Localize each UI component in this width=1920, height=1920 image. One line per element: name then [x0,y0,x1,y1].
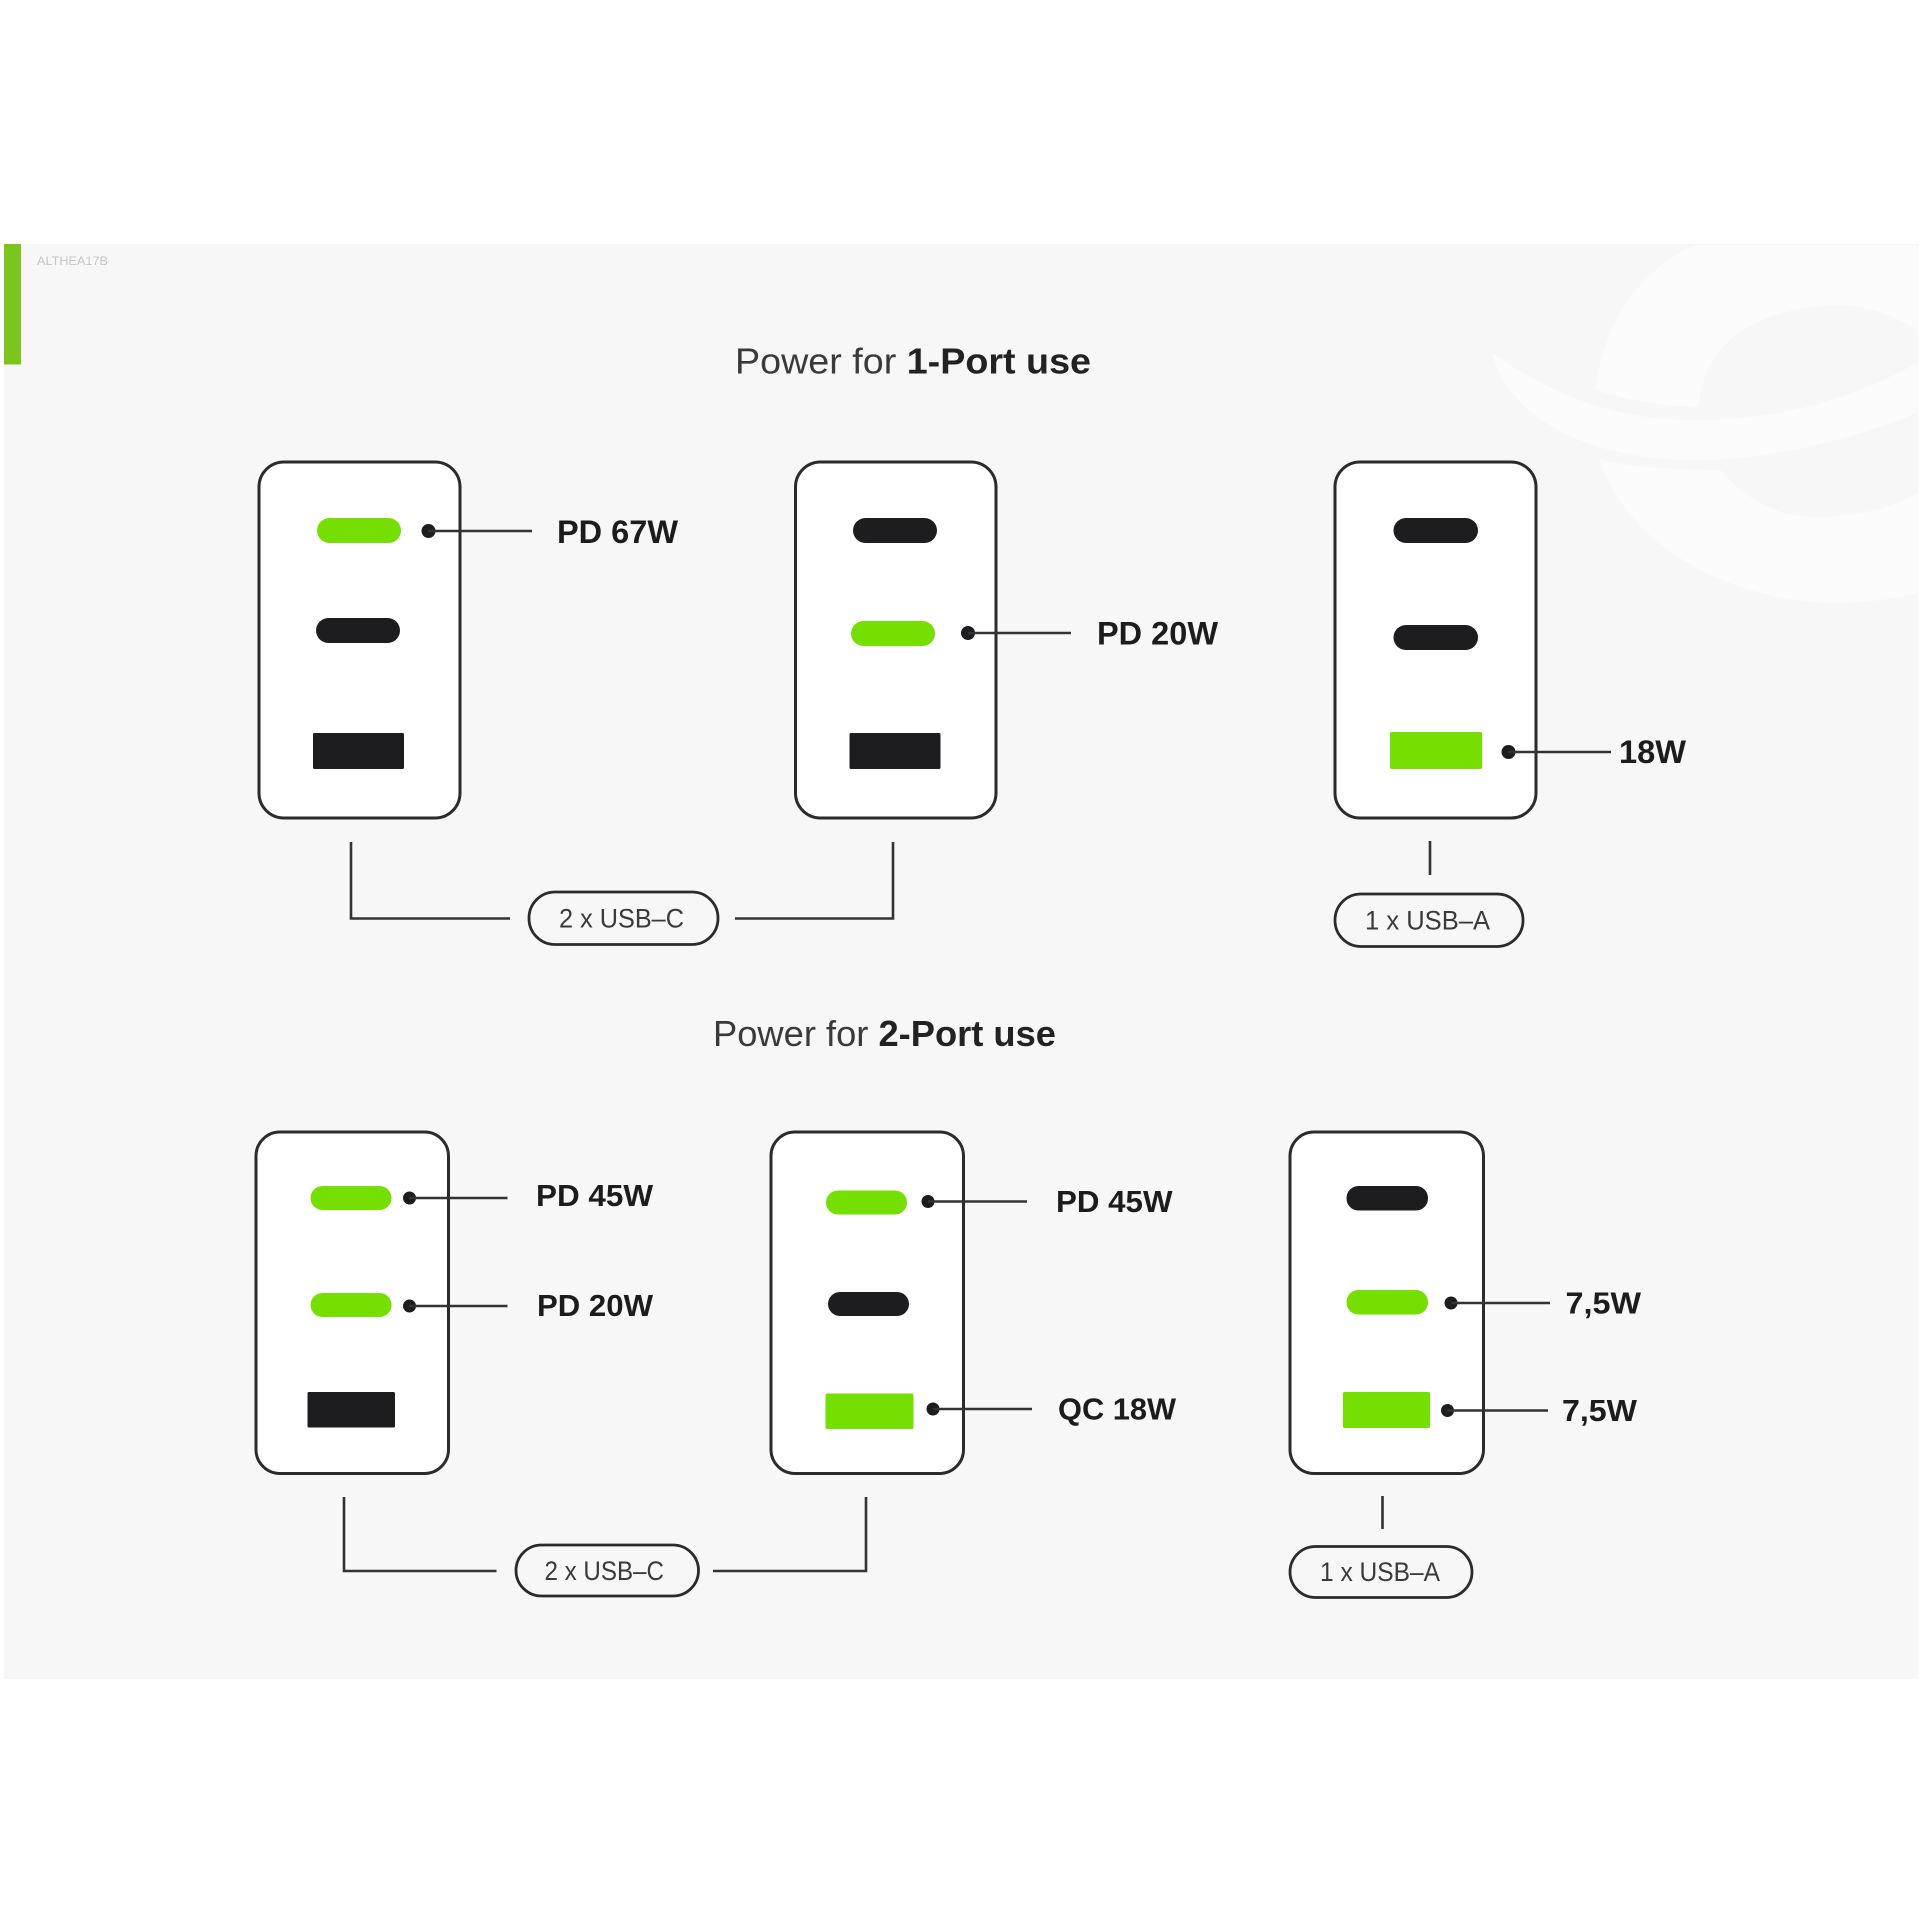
callout: 18W: 18W [1619,734,1687,770]
active USB-C port [851,621,935,646]
callout leader [922,1195,1027,1208]
pill text: 2 x USB–C [559,904,684,934]
pill label [1335,894,1523,946]
bracket: 1 x USB-A, row 2 [1290,1496,1472,1598]
callout leader [403,1300,508,1312]
charger: 18W [1335,462,1687,818]
active USB-A port [826,1394,914,1429]
bracket: 1 x USB-A, row 1 [1335,841,1523,946]
charger: 7,5W + 7,5W [1290,1132,1641,1474]
inactive USB-A port [308,1392,395,1428]
callout: 7,5W: 7,5W [1566,1286,1641,1320]
callout leader [422,524,532,538]
active USB-A port [1390,732,1482,769]
pill text: 1 x USB–A [1320,1557,1440,1587]
model code: ALTHEA17B [37,254,108,268]
callout: PD 20W: PD 20W [1097,616,1219,652]
inactive USB-A port [850,733,940,769]
active USB-C port [310,1293,392,1317]
callout leader [403,1192,508,1204]
inactive USB-C port [1394,625,1478,650]
charger: PD 45W + QC 18W [771,1132,1176,1474]
pill text: 1 x USB–A [1365,906,1490,936]
charger: PD 67W [259,462,679,818]
inactive USB-C port [828,1292,909,1316]
active USB-C port [317,518,401,543]
inactive USB-C port [1394,518,1478,543]
bracket: 2 x USB-C, row 2 [344,1497,866,1596]
callout leader [961,626,1071,640]
active USB-C port [1346,1290,1428,1314]
inactive USB-A port [313,733,404,769]
callout leader [1444,1296,1550,1310]
watermark logo swoosh [1492,245,1917,603]
charger: PD 45W + PD 20W [256,1132,653,1474]
callout: 7,5W: 7,5W [1562,1394,1637,1428]
pill label [516,1545,698,1596]
green accent bar [4,244,21,364]
callout: PD 20W: PD 20W [537,1289,653,1323]
pill text: 2 x USB–C [544,1556,664,1586]
callout leader [1502,745,1611,759]
pill label [529,892,718,944]
active USB-C port [310,1186,392,1210]
inactive USB-C port [1346,1186,1428,1210]
callout: QC 18W: QC 18W [1058,1392,1176,1426]
active USB-A port [1343,1392,1430,1428]
callout: PD 45W: PD 45W [536,1179,653,1213]
panel: background [4,244,1918,1679]
active USB-C port [826,1190,907,1214]
heading: 2-port use: Power for 2-Port use [713,1013,1056,1054]
callout: PD 45W: PD 45W [1056,1185,1173,1219]
pill label [1290,1546,1472,1598]
callout leader [1441,1404,1548,1417]
callout: PD 67W: PD 67W [557,514,679,550]
bracket: 2 x USB-C, row 1 [351,842,893,944]
charger: PD 20W [796,462,1219,818]
heading: 1-port use: Power for 1-Port use [735,340,1091,382]
inactive USB-C port [853,518,937,543]
inactive USB-C port [316,618,400,643]
callout leader [926,1402,1032,1416]
